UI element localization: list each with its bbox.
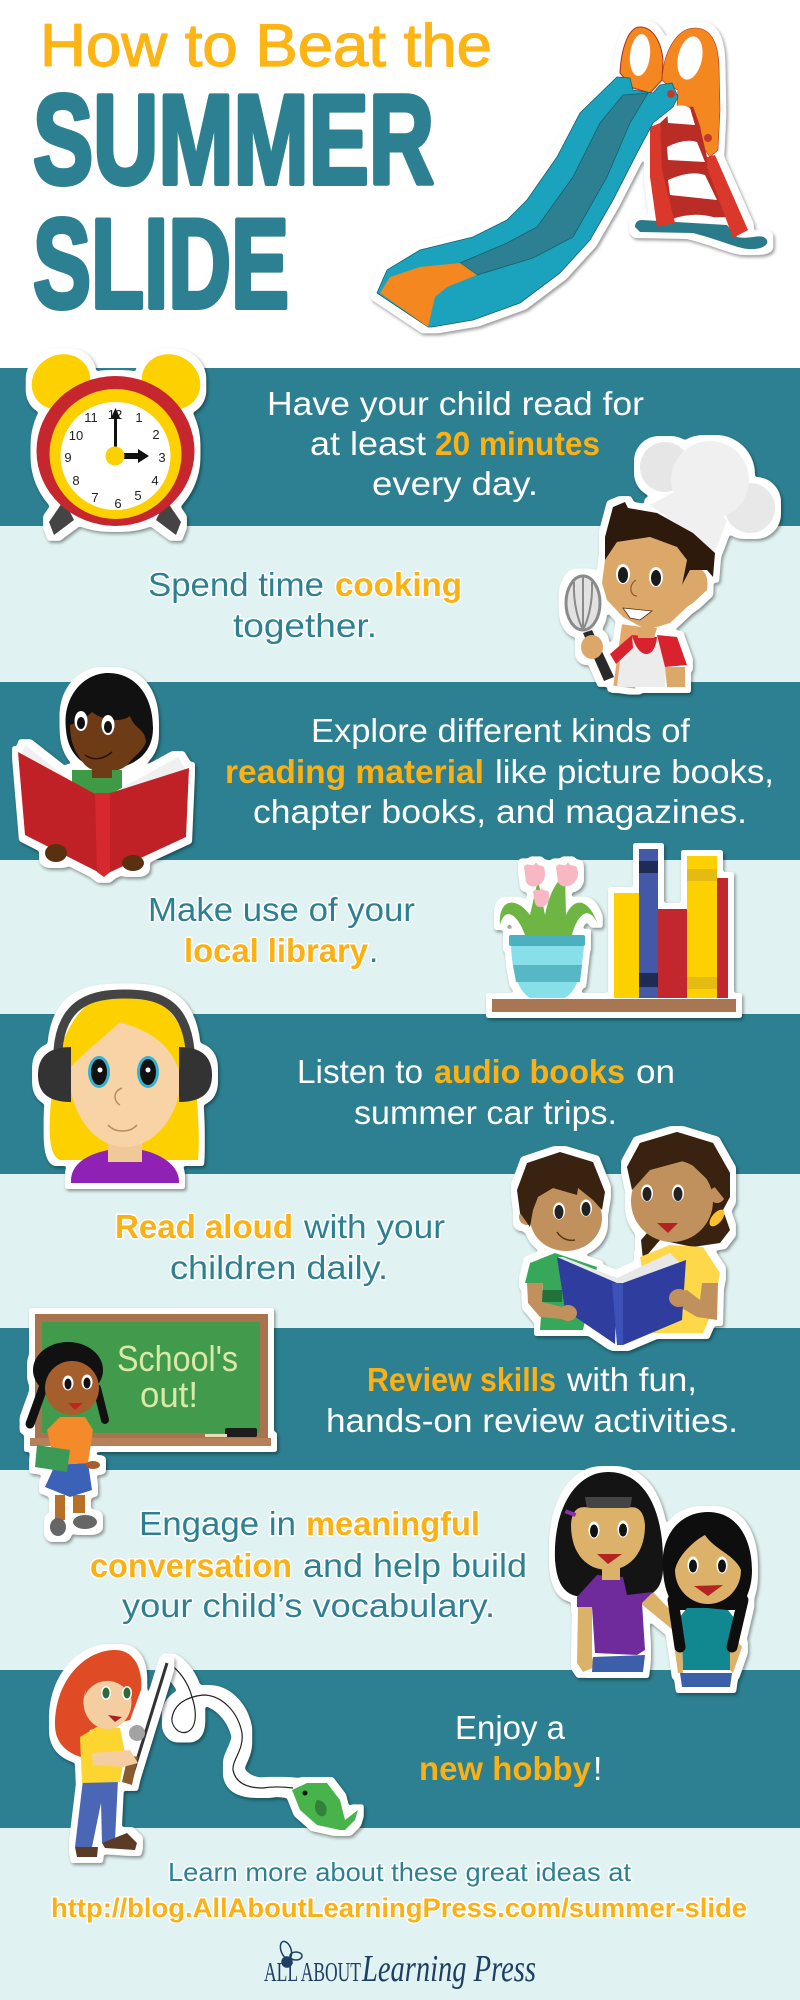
icon: boy reading red book <box>18 673 189 877</box>
fish <box>292 1783 358 1830</box>
text: meaningful conversation <box>90 1506 527 1625</box>
chalkboard <box>30 1314 271 1446</box>
chalkboard: out! <box>140 1374 198 1415</box>
band 1 <box>0 368 800 526</box>
logo: All About Learning Press: Learning Press <box>361 1948 536 1990</box>
title line: SUMMER: SUMMER <box>33 68 434 210</box>
text: review skills: with fun, <box>566 1362 697 1399</box>
clock numbers: 12 <box>108 407 122 422</box>
ladder body <box>650 105 748 238</box>
icon: two sisters <box>555 1472 752 1687</box>
blue book <box>557 1253 689 1345</box>
text: new hobby: Enjoy a <box>455 1710 565 1747</box>
shirt <box>610 624 687 689</box>
text: read 20 minutes: 20 minutes <box>435 426 600 463</box>
text: reading material: chapter books, and magazines. <box>253 794 747 831</box>
chalkboard: School's <box>117 1338 238 1379</box>
icon: bee <box>278 1940 302 1967</box>
text: cooking: Spend time <box>148 567 324 604</box>
clock numbers: 2 <box>152 427 160 442</box>
text: reading material: reading material <box>225 754 484 791</box>
title <box>33 12 492 334</box>
logo: All About Learning Press <box>264 1940 536 1990</box>
text: read aloud <box>115 1209 445 1287</box>
text: review skills: hands-on review activities. <box>326 1403 738 1440</box>
text: reading material <box>225 713 774 831</box>
text: local library <box>148 892 415 970</box>
clock numbers: 9 <box>64 450 72 465</box>
hair <box>605 502 715 585</box>
chef hat <box>640 441 775 552</box>
icon: chef boy with whisk <box>566 441 775 689</box>
text: cooking <box>148 567 462 645</box>
text: new hobby: ! <box>593 1751 602 1788</box>
clock numbers: 6 <box>114 496 122 511</box>
text: audio books: summer car trips. <box>354 1095 617 1132</box>
icon: chalkboard with girl <box>30 1314 271 1536</box>
clock numbers: 10 <box>69 428 83 443</box>
learn more line: Learn more about these great ideas at <box>168 1857 632 1887</box>
band 3 <box>0 1014 800 1174</box>
band 5 <box>0 1670 800 1828</box>
icon: playground slide <box>377 27 767 327</box>
brother <box>517 1152 605 1330</box>
text: local library: . <box>369 933 378 970</box>
flower pot <box>500 862 598 998</box>
text: read aloud: children daily. <box>170 1250 388 1287</box>
clock numbers: 5 <box>134 488 142 503</box>
text: audio books <box>297 1054 675 1132</box>
icon: flowers and books on shelf <box>492 849 736 1012</box>
big sister <box>555 1472 677 1672</box>
clock bells <box>22 344 210 420</box>
clock numbers: 1 <box>135 410 143 425</box>
text: audio books: audio books <box>434 1054 625 1091</box>
logo: All About Learning Press: ALL ABOUT <box>264 1957 361 1987</box>
chute <box>377 77 678 327</box>
text: meaningful conversation: Engage in <box>139 1506 296 1543</box>
text: meaningful conversation: your child’s vocabulary. <box>122 1588 495 1625</box>
sister <box>627 1132 730 1333</box>
title line: SLIDE: SLIDE <box>33 192 289 334</box>
face <box>602 537 708 630</box>
white header area <box>0 0 800 368</box>
icon: two children reading blue book <box>517 1132 730 1345</box>
text: meaningful conversation: and help build <box>303 1548 527 1585</box>
clock numbers: 7 <box>91 490 99 505</box>
text: review skills <box>326 1362 738 1440</box>
icon: alarm clock <box>22 344 210 535</box>
text: review skills: Review skills <box>367 1362 556 1399</box>
girl with orange shirt <box>30 1342 105 1536</box>
title line: How to Beat the: How to Beat the <box>40 12 492 79</box>
text: local library: local library <box>184 933 368 970</box>
text: read aloud: with your <box>303 1209 445 1246</box>
url line: http://blog.AllAboutLearningPress.com/summer-slide <box>51 1893 747 1923</box>
clock numbers: 11 <box>84 410 98 425</box>
band 2 <box>0 682 800 860</box>
text: audio books: Listen to <box>297 1054 423 1091</box>
icon: girl with headphones <box>38 990 212 1183</box>
icon: fishing line and fish <box>167 1663 358 1830</box>
clock numbers: 4 <box>151 473 159 488</box>
text: reading material: like picture books, <box>495 754 774 791</box>
text: cooking: cooking <box>335 567 462 604</box>
clock numbers: 3 <box>158 450 166 465</box>
text: read aloud: Read aloud <box>115 1209 293 1246</box>
ladder panels <box>620 27 720 157</box>
whisk <box>566 576 614 681</box>
text: read 20 minutes <box>267 386 644 503</box>
icon: girl fishing <box>55 1650 167 1857</box>
clock numbers: 8 <box>72 473 80 488</box>
little sister <box>663 1512 752 1687</box>
footer text <box>51 1857 747 1923</box>
text: reading material: Explore different kinds of <box>311 713 691 750</box>
text: cooking: together. <box>233 608 377 645</box>
fishing line <box>167 1663 293 1788</box>
base <box>635 220 767 249</box>
text: meaningful conversation: meaningful <box>306 1506 480 1543</box>
clock numbers <box>64 407 166 511</box>
text: local library: Make use of your <box>148 892 415 929</box>
text: new hobby <box>419 1710 602 1788</box>
text: read 20 minutes: every day. <box>372 466 538 503</box>
text: read 20 minutes: Have your child read for <box>267 386 644 423</box>
text: meaningful conversation: conversation <box>90 1548 292 1585</box>
text: read 20 minutes: at least <box>310 426 427 463</box>
text: audio books: on <box>636 1054 675 1091</box>
band 4 <box>0 1328 800 1470</box>
text: new hobby: new hobby <box>419 1751 591 1788</box>
